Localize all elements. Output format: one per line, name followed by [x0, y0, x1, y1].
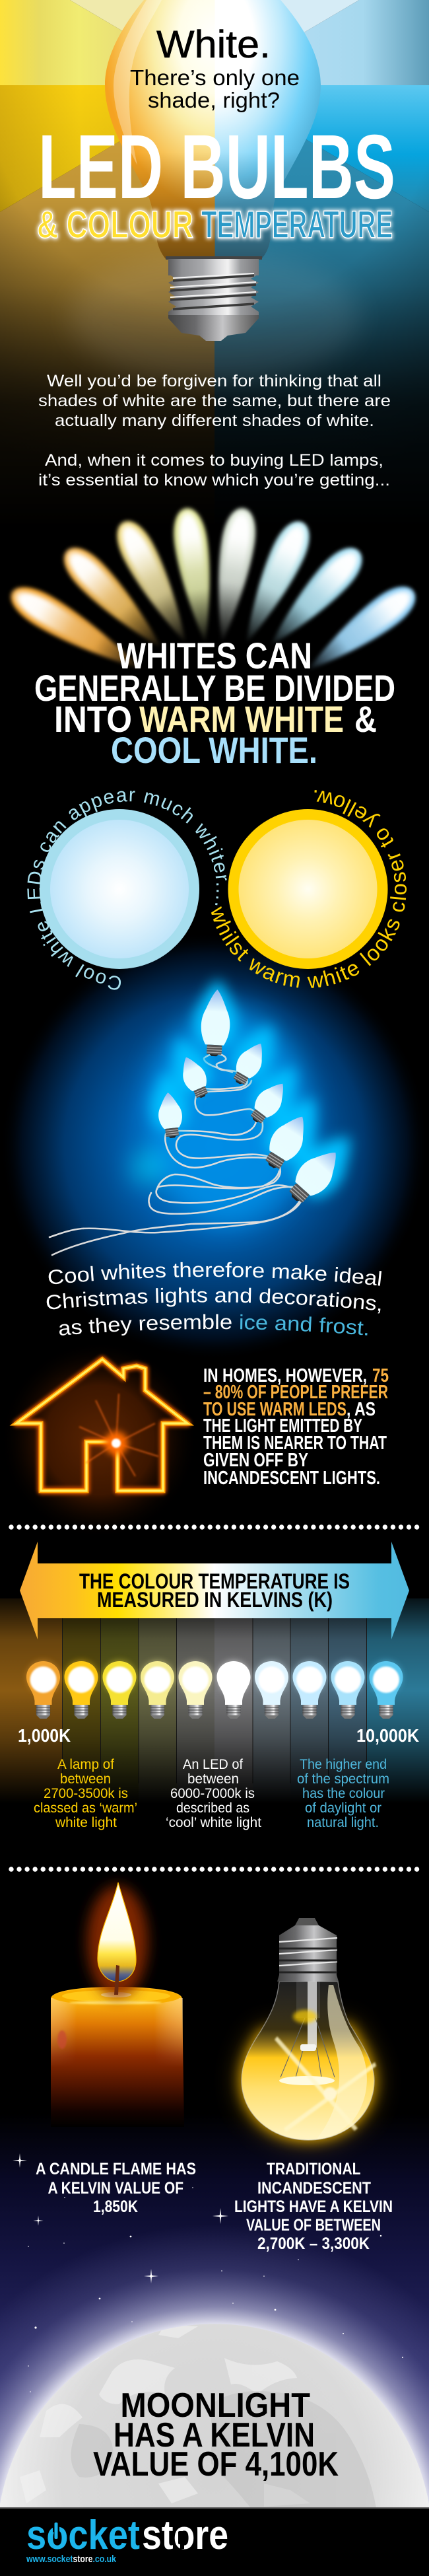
icon: light flare	[79, 1394, 158, 1476]
panel: candle	[51, 1882, 184, 2127]
text: cool description: An LED of	[183, 1757, 243, 1772]
heading: moonlight value: MOONLIGHT	[120, 2386, 310, 2425]
text: daylight description: has the colour	[302, 1786, 385, 1801]
filament	[279, 1982, 335, 2085]
panel: incandescent bulb	[242, 1918, 376, 2140]
text: incandescent value: 2,700K – 3,300K	[257, 2235, 370, 2253]
glass	[242, 1982, 374, 2140]
text: candle flame value	[36, 2160, 196, 2216]
text: cool description: ‘cool’ white light	[166, 1815, 261, 1830]
panel: warm white circle	[211, 790, 407, 988]
text: candle flame value: 1,850K	[93, 2198, 138, 2216]
panel: cool white circle	[27, 791, 227, 990]
bulb 2	[228, 1038, 271, 1089]
bulb 1	[199, 989, 232, 1057]
bulb 6	[258, 1108, 315, 1174]
intro text: And, when it comes to buying LED lamps,	[45, 451, 383, 470]
footer band	[0, 2509, 429, 2576]
bulb 3 yellow	[103, 1661, 136, 1719]
bulb 5 cream	[178, 1661, 213, 1719]
text: cool whites caption: as they resemble ice and frost.	[59, 1314, 368, 1336]
panel: moon	[0, 2324, 429, 2509]
arrow heading	[79, 1569, 350, 1612]
heading: warm and cool whites: WARM WHITE	[139, 698, 344, 740]
text: homes prefer warm LEDs: 75	[372, 1365, 389, 1386]
text: incandescent value: LIGHTS HAVE A KELVIN	[234, 2198, 393, 2216]
heading: colour temperature	[37, 203, 393, 246]
subtitle: There’s only one	[130, 65, 300, 90]
scale label: 10,000K: 10,000K	[356, 1725, 419, 1746]
heading: moonlight value	[93, 2386, 339, 2484]
bulb 4	[245, 1077, 292, 1128]
bulb 9 light blue	[331, 1661, 364, 1719]
bulb 7	[282, 1142, 348, 1209]
arrow heading: MEASURED IN KELVINS (K)	[97, 1588, 333, 1612]
panel: glowing house	[0, 1341, 198, 1539]
subtitle: shade, right?	[148, 88, 280, 112]
text: cool description: described as	[176, 1801, 249, 1816]
spectrum columns	[0, 1598, 429, 1803]
icon: blue bulbs	[147, 978, 367, 1209]
logo: socketstore: socket	[26, 2513, 140, 2558]
panel: Christmas lights tree	[50, 978, 367, 1255]
scale label: 1,000K: 1,000K	[18, 1725, 71, 1746]
text: incandescent value: VALUE OF BETWEEN	[246, 2216, 381, 2235]
glow	[242, 2024, 374, 2140]
curved caption: cool white: Cool white LEDs can appear much whiter....	[27, 791, 227, 990]
bulb 6 white	[216, 1661, 251, 1719]
heading: moonlight value: HAS A KELVIN	[114, 2416, 315, 2454]
text: incandescent value	[234, 2160, 393, 2253]
text: homes prefer warm LEDs: TO USE WARM LEDS	[203, 1399, 346, 1420]
icon: bulb screw base	[166, 256, 262, 341]
text: cool whites caption: Cool whites therefore make ideal	[49, 1262, 381, 1286]
bulb 8 pale blue	[293, 1661, 326, 1719]
bulb 10 blue	[370, 1661, 403, 1719]
text: daylight description: The higher end	[300, 1757, 387, 1772]
text: daylight description: of the spectrum	[297, 1771, 389, 1787]
text: cool whites caption	[46, 1262, 381, 1336]
text: candle flame value: A CANDLE FLAME HAS	[36, 2160, 196, 2178]
heading: colour temperature: & COLOUR	[37, 203, 193, 246]
stars	[13, 2153, 403, 2392]
light streaks	[275, 2036, 376, 2132]
intro text: Well you’d be forgiven for thinking that all	[47, 372, 381, 390]
text: homes prefer warm LEDs: , AS	[346, 1399, 376, 1420]
text: warm description: A lamp of	[57, 1757, 114, 1772]
icon: large split bulb	[99, 0, 330, 259]
text: daylight description	[297, 1757, 389, 1830]
text: daylight description: of daylight or	[305, 1801, 381, 1816]
row of ten bulbs	[26, 1661, 403, 1719]
text: homes prefer warm LEDs: THE LIGHT EMITTED BY	[203, 1415, 362, 1437]
heading: warm and cool whites: WHITES CAN	[117, 635, 312, 676]
text: daylight description: natural light.	[307, 1815, 379, 1830]
icon: power symbol	[53, 2522, 59, 2539]
moon surface patches	[20, 2325, 376, 2508]
intro text	[38, 372, 391, 489]
text: cool description	[166, 1757, 261, 1830]
panel: header with bulb	[0, 0, 429, 528]
heading: warm and cool whites: &	[354, 698, 377, 740]
candle flame	[87, 1882, 148, 1998]
heading: warm and cool whites	[34, 635, 395, 771]
icon: plug symbol	[178, 2531, 186, 2549]
text: cool description: between	[187, 1771, 239, 1787]
heading: colour temperature: & COLOUR	[37, 203, 193, 246]
bulb 3	[176, 1053, 213, 1102]
subtitle	[130, 65, 300, 112]
text: incandescent value: INCANDESCENT	[257, 2179, 371, 2198]
text: homes prefer warm LEDs: GIVEN OFF BY	[203, 1450, 308, 1471]
logo: socketstore: store	[142, 2513, 228, 2558]
double arrow	[20, 1542, 409, 1639]
logo: socketstore	[26, 2513, 228, 2565]
arrow heading: THE COLOUR TEMPERATURE IS	[79, 1569, 350, 1593]
fan of glowing whites	[4, 506, 423, 684]
intro text: shades of white are the same, but there are	[38, 392, 391, 410]
text: warm description: white light	[55, 1815, 117, 1830]
screw cap	[277, 1918, 339, 1982]
heading: warm and cool whites: COOL WHITE.	[111, 729, 317, 771]
text: warm description	[34, 1757, 137, 1830]
title: White: White.	[156, 23, 271, 66]
text: incandescent value: TRADITIONAL	[267, 2160, 360, 2178]
bulb 2 amber	[65, 1661, 98, 1719]
bulb 7 ice	[255, 1661, 288, 1719]
candle body	[51, 1987, 184, 2127]
text: warm description: classed as ‘warm’	[34, 1801, 137, 1816]
blue glow behind tree	[0, 931, 429, 1361]
text: candle flame value: A KELVIN VALUE OF	[48, 2179, 183, 2198]
bulb 1 orange	[26, 1661, 60, 1719]
intro text: it’s essential to know which you’re getting...	[38, 471, 390, 489]
bulb 4 pale yellow	[141, 1661, 174, 1719]
text: warm description: 2700-3500k is	[44, 1786, 128, 1801]
panel: night sky and moon backdrop	[0, 2114, 429, 2510]
text: web address: www.socketstore.co.uk	[26, 2554, 117, 2565]
curved caption: warm white: whilst warm white looks closer to yellow.	[211, 790, 407, 988]
text: warm description: between	[60, 1771, 111, 1787]
text: cool description: 6000-7000k is	[170, 1786, 255, 1801]
heading: moonlight value: VALUE OF 4,100K	[93, 2445, 339, 2484]
text: cool whites caption: Christmas lights and decorations,	[46, 1287, 380, 1313]
heading: warm and cool whites: INTO	[54, 698, 132, 740]
bulb 5	[156, 1091, 184, 1139]
wire	[50, 1054, 302, 1255]
text: homes prefer warm LEDs	[203, 1365, 389, 1489]
sunburst background	[0, 0, 429, 528]
intro text: actually many different shades of white.	[55, 411, 374, 430]
panel: colour temperature scale	[0, 1542, 429, 1830]
text: homes prefer warm LEDs: IN HOMES, HOWEVER,	[203, 1365, 367, 1386]
